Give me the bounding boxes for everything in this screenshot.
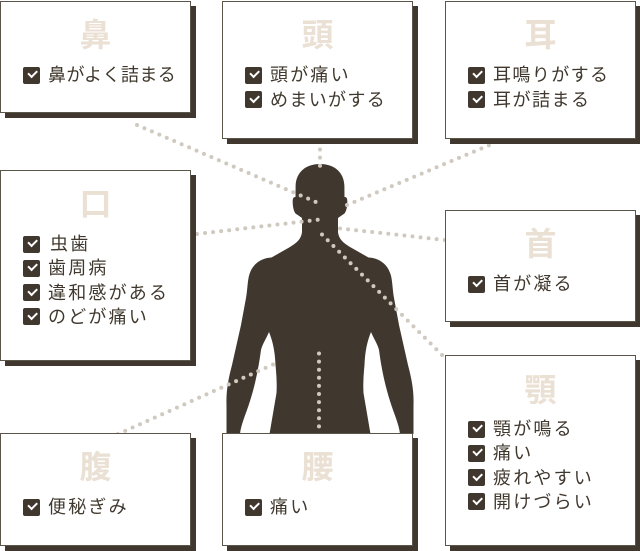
connector: ear (347, 144, 492, 205)
icon: human body silhouette (226, 164, 414, 434)
heading: ear: 耳 (524, 17, 556, 53)
checklist: mouth: 歯周病 (48, 258, 109, 278)
connector: head (318, 150, 322, 166)
checklist: mouth: 違和感がある (48, 283, 169, 303)
panel: mouth (0, 170, 191, 361)
connector: nose (137, 125, 317, 202)
checklist: mouth: のどが痛い (48, 307, 149, 327)
panel: abdomen (0, 433, 191, 546)
checklist: nose: 鼻がよく詰まる (48, 65, 176, 85)
panel: ear (445, 1, 636, 139)
checklist: head: 頭が痛い (270, 65, 351, 85)
panel: neck (445, 210, 636, 322)
heading: jaw: 顎 (524, 372, 556, 408)
panel: nose (0, 1, 191, 113)
heading: nose: 鼻 (79, 17, 112, 53)
checklist: ear (468, 65, 609, 110)
panel: jaw (445, 355, 636, 546)
panel: head (222, 1, 413, 139)
checklist: jaw: 開けづらい (493, 492, 594, 512)
checklist: jaw (468, 419, 594, 512)
heading: mouth: 口 (79, 186, 112, 222)
heading: neck: 首 (524, 226, 556, 262)
heading: lower back: 腰 (301, 449, 334, 485)
checklist: head: めまいがする (270, 90, 386, 110)
checklist: jaw: 痛い (493, 443, 533, 463)
checklist: neck: 首が凝る (493, 274, 574, 294)
checklist: head (245, 65, 386, 110)
connector: jaw (322, 234, 445, 358)
checklist: jaw: 顎が鳴る (493, 419, 574, 439)
connector: mouth (197, 220, 320, 234)
heading: abdomen: 腹 (79, 449, 112, 485)
checklist: ear: 耳鳴りがする (493, 65, 609, 85)
heading: head: 頭 (301, 17, 334, 53)
connector: neck (340, 228, 445, 240)
checklist: mouth (23, 234, 169, 327)
checklist: lower back (245, 497, 310, 517)
checklist: lower back: 痛い (270, 497, 310, 517)
checklist: jaw: 疲れやすい (493, 468, 594, 488)
connector: abdomen (116, 364, 273, 435)
checklist: abdomen: 便秘ぎみ (48, 497, 129, 517)
panel: lower back (222, 433, 413, 546)
connector: lower back (317, 354, 321, 434)
checklist: mouth: 虫歯 (50, 234, 90, 254)
checklist: ear: 耳が詰まる (493, 90, 590, 110)
